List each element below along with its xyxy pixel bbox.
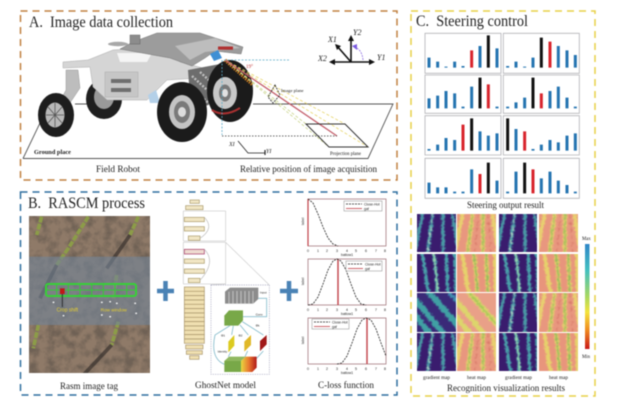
heading C: C. Steering control bbox=[416, 13, 528, 30]
field photo with rasm tag bbox=[28, 215, 151, 374]
plus sign 2 bbox=[280, 281, 298, 301]
C-loss chart 1: 4 bbox=[346, 249, 348, 253]
canopy highlight bbox=[175, 38, 240, 60]
red bars bbox=[463, 42, 550, 193]
C-loss chart 3 bbox=[301, 318, 386, 375]
front strut bbox=[54, 70, 80, 112]
C-loss chart 1: 0 bbox=[307, 249, 309, 253]
mechanical suspension bbox=[188, 64, 224, 106]
caption: Recognition visualization results: Recognition visualization results bbox=[447, 384, 565, 394]
panel B border bbox=[20, 192, 397, 395]
C-loss chart 1: 3 bbox=[336, 249, 338, 253]
highlighted block bbox=[184, 249, 204, 254]
colour scale: Min bbox=[582, 355, 591, 360]
panel: A. Image data collection bbox=[20, 11, 397, 180]
detail labels: Φ1 bbox=[221, 333, 225, 337]
blue bars bbox=[429, 46, 575, 193]
heading A: A. Image data collection bbox=[29, 14, 173, 31]
body window bbox=[117, 53, 152, 62]
caption: GhostNet model: GhostNet model bbox=[195, 381, 256, 391]
caption: Steering output result: Steering output result bbox=[467, 200, 544, 210]
map column labels: gradient map bbox=[423, 375, 450, 381]
detail labels: Identity bbox=[218, 349, 228, 353]
axis: XI YI bbox=[228, 141, 272, 155]
C-loss chart 1: Close-Hot bbox=[364, 202, 380, 206]
image plane label: Image plane bbox=[281, 88, 304, 93]
residual arcs bbox=[200, 217, 210, 280]
output green top bbox=[224, 357, 246, 361]
C-loss chart 1: gaf bbox=[364, 207, 369, 211]
suspension detail bbox=[190, 72, 222, 104]
crop rows bbox=[33, 217, 138, 348]
arrow bbox=[61, 294, 64, 307]
soil texture bbox=[29, 216, 150, 373]
large wheel near bbox=[157, 82, 207, 142]
yellow map 2 bbox=[244, 335, 251, 352]
C-loss chart 3: 8 bbox=[384, 367, 386, 371]
caption: Relative position: Relative position of image acquisition bbox=[240, 164, 377, 175]
colour scale: Max bbox=[582, 237, 591, 242]
top sensor bbox=[130, 35, 140, 44]
ground place label: Ground place bbox=[34, 150, 71, 156]
C-loss chart 3: 1 bbox=[317, 367, 319, 371]
C-loss chart 2: 0 bbox=[307, 308, 309, 312]
label: row window: Row window bbox=[101, 307, 127, 312]
green conv cube bbox=[224, 310, 243, 326]
C-loss chart 1: 8 bbox=[384, 249, 386, 253]
robot body bbox=[63, 47, 203, 100]
coordinate axes X1 X2 Y1 Y2: Y2 bbox=[353, 28, 361, 37]
C-loss chart 1 bbox=[301, 199, 386, 257]
connection lines bbox=[214, 298, 267, 364]
blue camera mount bbox=[210, 50, 222, 61]
C-loss chart 3: 2 bbox=[326, 367, 328, 371]
grey feature stack bbox=[225, 288, 258, 304]
C-loss chart 1: 7 bbox=[375, 249, 377, 253]
C-loss chart 3: Close-Hot bbox=[332, 320, 348, 324]
C-loss chart 2: 5 bbox=[355, 308, 357, 312]
C-loss chart 1: label bbox=[301, 217, 305, 225]
GhostNet model diagram bbox=[183, 200, 269, 374]
field robot illustration bbox=[38, 33, 253, 142]
black bars bbox=[472, 35, 541, 193]
C-loss chart 2: gaf bbox=[365, 267, 370, 271]
image plane bbox=[268, 85, 280, 103]
coordinate axes X1 X2 Y1 Y2: Y1 bbox=[377, 53, 385, 62]
C-loss chart 1: 1 bbox=[317, 249, 319, 253]
label: crop shift: Crop shift bbox=[57, 308, 79, 314]
C-loss chart 2: 3 bbox=[336, 308, 338, 312]
angle label: 19° bbox=[246, 65, 253, 70]
map column labels bbox=[423, 375, 568, 381]
C-loss chart 1: 6 bbox=[365, 249, 367, 253]
C-loss chart 2: label bbox=[301, 277, 305, 285]
C-loss chart 3: batlow1 bbox=[341, 371, 353, 375]
top blocks bbox=[184, 200, 204, 283]
red map bbox=[260, 335, 267, 351]
coordinate axes X1 X2 Y1 Y2: X2 bbox=[317, 54, 327, 63]
panel: B. RASCM process bbox=[20, 192, 397, 395]
C-loss chart 1: batlow1 bbox=[341, 253, 353, 257]
coordinate axes X1 X2 Y1 Y2: X1 bbox=[327, 35, 337, 44]
detail labels: Φk bbox=[256, 323, 260, 327]
C-loss chart 2: Close-Hot bbox=[365, 262, 381, 266]
side panel bbox=[105, 72, 138, 97]
top disc bbox=[108, 42, 128, 46]
C-loss chart 3: gaf bbox=[332, 325, 337, 329]
group boxes bbox=[183, 211, 226, 284]
C-loss chart 2: batlow1 bbox=[341, 312, 353, 316]
C-loss chart 3: 4 bbox=[346, 367, 348, 371]
canopy bbox=[120, 33, 243, 66]
C-loss chart 2: 2 bbox=[326, 308, 328, 312]
caption: Field Robot: Field Robot bbox=[96, 165, 140, 175]
C-loss chart 3: 6 bbox=[365, 367, 367, 371]
camera view rays bbox=[222, 60, 368, 147]
caption: Rasm image tag: Rasm image tag bbox=[60, 382, 118, 392]
colour scale bbox=[582, 237, 591, 360]
C-loss chart 3: label bbox=[301, 336, 305, 344]
red point bbox=[60, 288, 65, 294]
detail labels: Conv bbox=[256, 313, 263, 317]
C-loss chart 3: 7 bbox=[375, 367, 377, 371]
plus sign 1 bbox=[157, 281, 174, 301]
map column labels: heat map bbox=[549, 375, 568, 381]
green cells bbox=[47, 284, 135, 296]
yellow map 1 bbox=[228, 335, 234, 352]
camera label bbox=[218, 46, 233, 50]
heading B: B. RASCM process bbox=[28, 195, 145, 212]
C-loss chart 2: 4 bbox=[346, 308, 348, 312]
detail labels bbox=[218, 290, 267, 353]
axis: XI YI: XI bbox=[228, 142, 236, 148]
soil bbox=[29, 216, 150, 373]
rear small wheel bbox=[86, 79, 122, 119]
panel: C. Steering control bbox=[411, 11, 595, 396]
furrows bbox=[40, 235, 130, 375]
C-loss chart 3: 0 bbox=[307, 367, 309, 371]
C-loss chart 2: 6 bbox=[365, 308, 367, 312]
annotated band bbox=[29, 257, 150, 325]
axis: XI YI: YI bbox=[266, 149, 272, 155]
connection to detail bbox=[211, 242, 269, 285]
projection plane label: Projection plane bbox=[330, 152, 362, 157]
output gradient bbox=[241, 357, 257, 372]
blue bracket bbox=[148, 90, 160, 103]
map column labels: gradient map bbox=[505, 375, 532, 381]
detail labels: Input bbox=[260, 290, 267, 294]
C-loss chart 3: 3 bbox=[336, 367, 338, 371]
C-loss chart 2: 8 bbox=[384, 308, 386, 312]
coordinate axes X1 X2 Y1 Y2 bbox=[317, 28, 385, 65]
ground plane bbox=[23, 104, 393, 158]
panel A border bbox=[20, 11, 397, 180]
main stack bbox=[184, 287, 204, 359]
recognition maps grid bbox=[411, 211, 582, 376]
C-loss chart 1: 2 bbox=[326, 249, 328, 253]
C-loss chart 2 bbox=[301, 259, 386, 316]
projection plane bbox=[306, 124, 368, 147]
panel C border bbox=[411, 11, 595, 396]
C-loss chart 1: 5 bbox=[355, 249, 357, 253]
white points bbox=[53, 302, 136, 317]
steering bar charts bbox=[425, 33, 579, 198]
C-loss chart 3: 5 bbox=[355, 367, 357, 371]
detail labels: Φ2 bbox=[238, 333, 243, 337]
caption: C-loss function: C-loss function bbox=[318, 380, 374, 391]
chart frames bbox=[425, 33, 579, 198]
output green bbox=[224, 361, 241, 372]
C-loss chart 2: 1 bbox=[317, 308, 319, 312]
front small wheel bbox=[38, 93, 74, 137]
large wheel far bbox=[207, 60, 253, 122]
C-loss chart 2: 7 bbox=[375, 308, 377, 312]
detail box bbox=[211, 285, 269, 374]
green box bbox=[46, 284, 136, 296]
map column labels: heat map bbox=[467, 375, 486, 381]
vents bbox=[111, 81, 131, 90]
